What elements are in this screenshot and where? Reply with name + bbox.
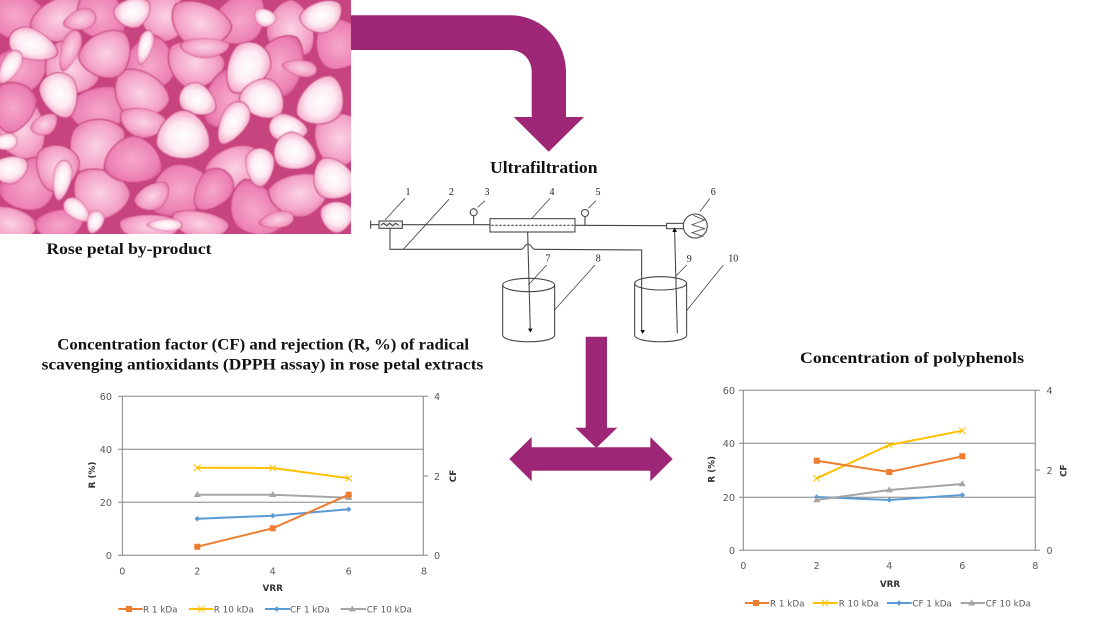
legend: left chart: CF 10 kDa (367, 605, 412, 615)
arrow: down and two-way split arrow (509, 337, 673, 481)
heading: right chart title: Concentration of polyphenols (800, 350, 1024, 367)
heading: left chart title (42, 336, 483, 374)
series: R 1 kDa (194, 492, 352, 550)
line chart: polyphenols: 4 (886, 561, 892, 572)
legend: left chart: R 10 kDa (214, 605, 254, 615)
line chart: DPPH antioxidants: VRR (263, 584, 283, 594)
line chart: polyphenols: VRR (880, 580, 900, 590)
line chart: polyphenols: 60 (723, 386, 735, 397)
line chart: polyphenols: 4 (1046, 386, 1053, 397)
line chart: polyphenols (708, 386, 1070, 609)
line chart: DPPH antioxidants: 0 (106, 551, 112, 562)
line chart: DPPH antioxidants: 20 (100, 498, 112, 509)
line chart: DPPH antioxidants: 4 (434, 392, 440, 403)
legend: left chart: R 1 kDa (143, 605, 178, 615)
series: R 10 kDa (194, 464, 352, 482)
legend: right chart: CF 1 kDa (912, 599, 952, 609)
line chart: polyphenols: CF (1060, 464, 1070, 477)
heading: left chart title: Concentration factor (CF) and rejection (R, %) of radical (57, 336, 470, 354)
diagram: ultrafiltration setup: 2 (449, 187, 454, 198)
legend: right chart: R 1 kDa (770, 599, 805, 609)
line chart: DPPH antioxidants: 0 (434, 551, 440, 562)
line chart: DPPH antioxidants: 8 (421, 566, 427, 578)
line chart: polyphenols: 6 (959, 561, 965, 572)
line chart: polyphenols: 2 (814, 561, 820, 572)
diagram: ultrafiltration setup: 7 (545, 253, 550, 264)
diagram: ultrafiltration setup: 1 (405, 187, 410, 198)
legend: right chart (745, 599, 1031, 609)
line chart: DPPH antioxidants: CF (449, 470, 459, 482)
line chart: DPPH antioxidants: 2 (434, 472, 440, 483)
line chart: DPPH antioxidants: 0 (119, 566, 125, 578)
series: CF 1 kDa (814, 492, 965, 503)
line chart: DPPH antioxidants (88, 392, 459, 615)
diagram: ultrafiltration setup: 8 (596, 254, 601, 265)
line chart: polyphenols: 2 (1046, 466, 1053, 477)
image: rose petals photograph (0, 0, 351, 234)
arrow: curved arrow to ultrafiltration (351, 15, 584, 152)
line chart: polyphenols: 40 (723, 439, 735, 450)
diagram: ultrafiltration setup: 10 (728, 254, 738, 265)
series: CF 1 kDa (194, 507, 352, 521)
line chart: polyphenols: 8 (1032, 561, 1038, 572)
line chart: polyphenols: 20 (723, 493, 735, 504)
series: R 10 kDa (813, 427, 966, 482)
line chart: DPPH antioxidants: 60 (100, 392, 112, 403)
diagram: ultrafiltration setup: 9 (687, 254, 692, 265)
heading: ultrafiltration: Ultrafiltration (490, 158, 598, 177)
line chart: DPPH antioxidants: 2 (194, 566, 200, 578)
line chart: DPPH antioxidants: 4 (270, 566, 276, 578)
diagram: ultrafiltration setup: 5 (595, 187, 600, 198)
series: R 1 kDa (814, 453, 965, 475)
line chart: DPPH antioxidants: R (%) (88, 462, 98, 488)
label: rose petal by-product: Rose petal by-product (46, 241, 212, 258)
line chart: DPPH antioxidants: 40 (100, 445, 112, 456)
legend: right chart: R 10 kDa (839, 599, 879, 609)
diagram: ultrafiltration setup: 6 (711, 187, 716, 198)
legend: right chart: CF 10 kDa (986, 599, 1031, 609)
diagram: ultrafiltration setup (371, 187, 738, 342)
line chart: polyphenols: 0 (740, 561, 746, 572)
legend: left chart: CF 1 kDa (290, 605, 330, 615)
diagram: ultrafiltration setup: 4 (549, 187, 554, 198)
series: CF 10 kDa (194, 491, 352, 500)
legend: left chart (118, 605, 412, 615)
line chart: polyphenols: R (%) (708, 456, 718, 483)
heading: left chart title: scavenging antioxidants (DPPH assay) in rose petal extracts (42, 356, 483, 374)
line chart: DPPH antioxidants: 6 (346, 566, 352, 578)
diagram: ultrafiltration setup: 3 (484, 187, 489, 198)
series: CF 10 kDa (813, 480, 966, 502)
line chart: polyphenols: 0 (1046, 546, 1053, 557)
line chart: polyphenols: 0 (729, 546, 735, 557)
